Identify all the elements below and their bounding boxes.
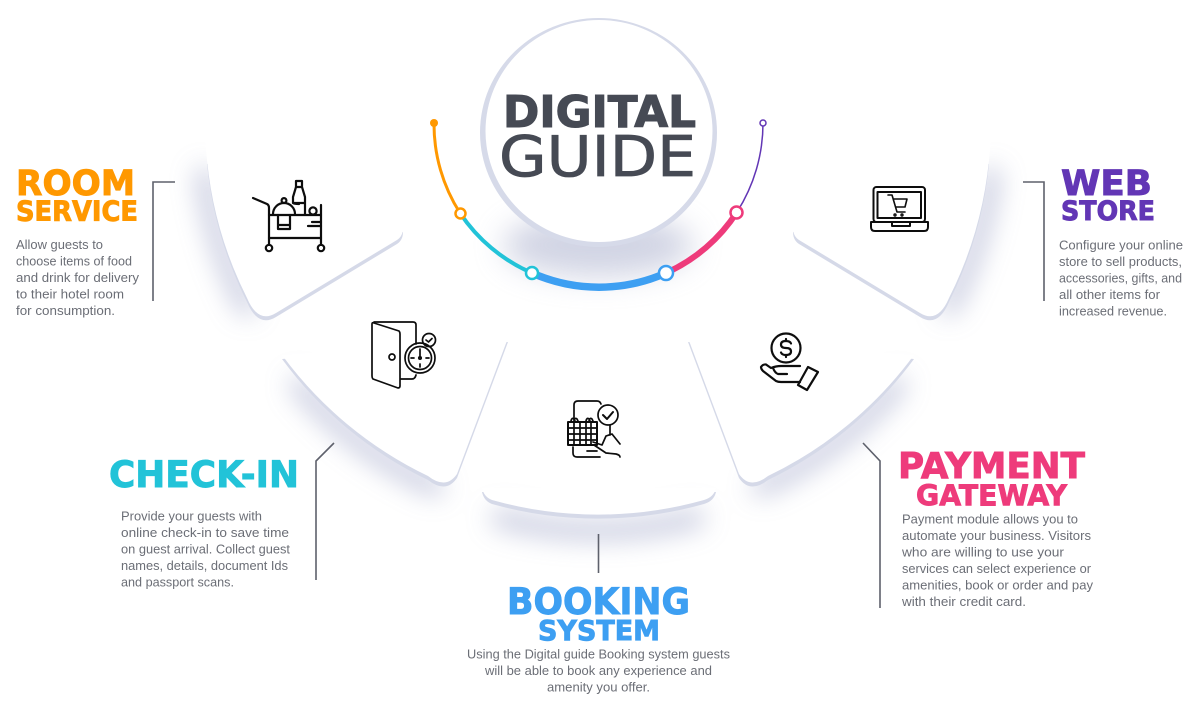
panel: payment gateway xyxy=(688,334,914,487)
title: GUIDE xyxy=(499,125,696,190)
connector: booking system xyxy=(598,534,600,573)
panel shadows xyxy=(205,176,991,530)
text: room service: Allow guests to xyxy=(16,237,103,252)
title xyxy=(499,88,696,190)
text: booking system: BOOKING xyxy=(507,580,690,623)
text: check-in: on guest arrival. Collect guest xyxy=(121,542,290,556)
text: check-in xyxy=(109,453,299,590)
text: room service: to their hotel room xyxy=(16,286,124,302)
text: web store: store to sell products, xyxy=(1059,254,1182,269)
text: payment gateway: with their credit card. xyxy=(901,594,1026,609)
text: check-in: online check-in to save time xyxy=(121,525,289,540)
icon: door with stopwatch xyxy=(372,322,436,388)
text: room service: and drink for delivery xyxy=(16,270,140,285)
text: room service: SERVICE xyxy=(16,196,138,228)
text: check-in: names, details, document Ids xyxy=(121,558,288,573)
panel: booking system xyxy=(482,401,716,519)
text: payment gateway: automate your business. Visitors xyxy=(902,528,1091,543)
text: payment gateway xyxy=(898,446,1093,609)
text: web store: accessories, gifts, and xyxy=(1059,270,1182,286)
text: payment gateway: PAYMENT xyxy=(898,446,1086,487)
text: booking system: SYSTEM xyxy=(538,615,660,647)
icon: booking calendar on phone xyxy=(568,401,620,457)
icon: hand with dollar coin xyxy=(761,334,818,390)
curved timeline arc xyxy=(430,119,766,287)
text: web store: STORE xyxy=(1061,196,1155,227)
text: payment gateway: GATEWAY xyxy=(916,480,1067,512)
text: check-in: CHECK-IN xyxy=(109,453,299,496)
panel: room service xyxy=(205,140,403,320)
connector: payment gateway xyxy=(863,443,880,608)
text: room service: choose items of food xyxy=(16,254,132,268)
text: web store: Configure your online xyxy=(1059,238,1183,252)
text: check-in: and passport scans. xyxy=(121,574,234,590)
center circle xyxy=(480,18,717,277)
icon: laptop with cart xyxy=(871,187,928,231)
panel: web store xyxy=(793,140,991,320)
connector: room service xyxy=(153,182,175,301)
title: DIGITAL xyxy=(503,88,696,138)
text: payment gateway: amenities, book or order and pay xyxy=(902,578,1093,592)
icon: room service trolley xyxy=(253,181,324,251)
text: payment gateway: services can select experience or xyxy=(902,561,1092,576)
text: booking system: Using the Digital guide Booking system guests xyxy=(467,646,730,662)
text: booking system xyxy=(467,580,730,694)
text: payment gateway: Payment module allows you to xyxy=(902,512,1078,526)
text: web store: WEB xyxy=(1061,164,1152,204)
text: web store xyxy=(1059,164,1183,318)
connector: web store xyxy=(1023,182,1044,301)
text: check-in: Provide your guests with xyxy=(121,508,262,524)
text: payment gateway: who are willing to use your xyxy=(901,544,1065,560)
connector: check-in xyxy=(316,443,334,580)
text: booking system: amenity you offer. xyxy=(547,680,650,694)
text: room service: ROOM xyxy=(16,164,135,204)
text: web store: increased revenue. xyxy=(1059,304,1167,318)
text: room service: for consumption. xyxy=(16,303,115,318)
text: booking system: will be able to book any experience and xyxy=(484,663,712,678)
text: room service xyxy=(16,164,140,318)
text: web store: all other items for xyxy=(1059,287,1161,302)
panel: check-in xyxy=(282,322,508,487)
